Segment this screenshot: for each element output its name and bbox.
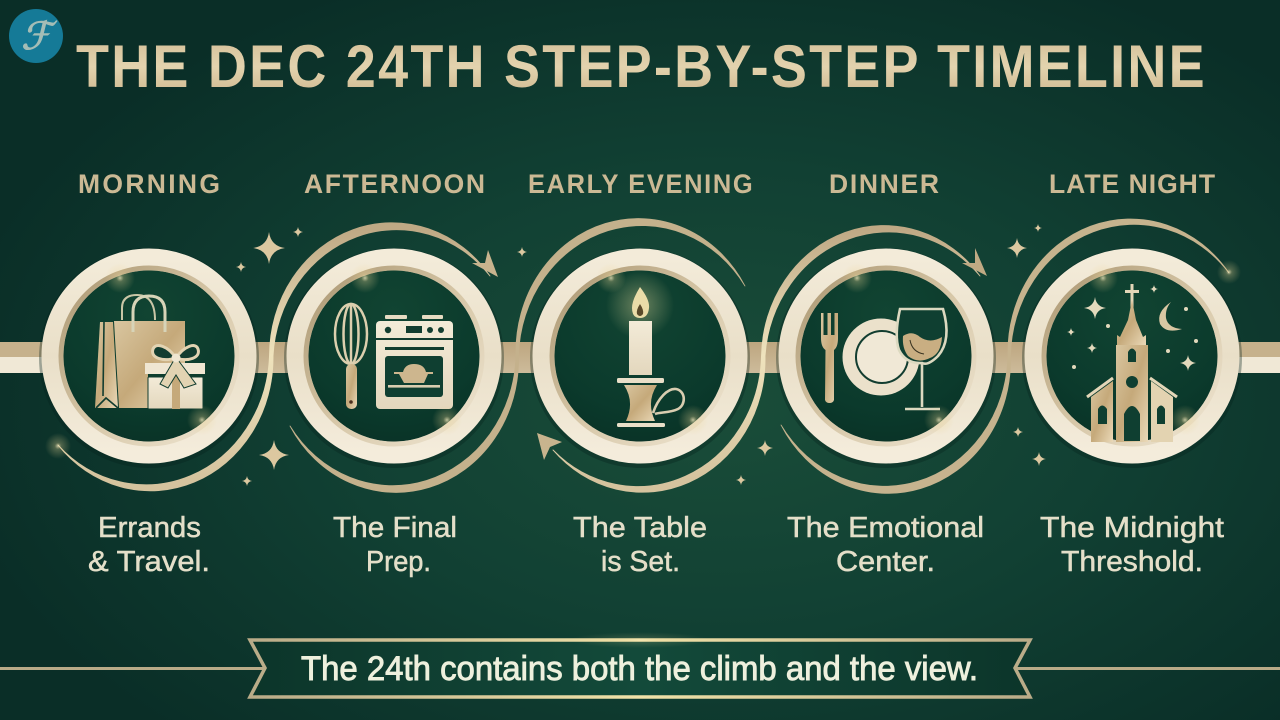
- logo badge: [9, 9, 63, 63]
- step descriptions: The Midnight: [1040, 512, 1224, 544]
- step descriptions: The Final: [333, 512, 457, 544]
- arc arrow: dinner to late night: [781, 219, 1241, 493]
- step 5 ring: late night: [1022, 248, 1242, 468]
- banner: closing statement: The 24th contains both the climb and the view.: [301, 650, 978, 688]
- timeline band: [0, 342, 1280, 373]
- step descriptions: Prep.: [366, 546, 431, 578]
- step descriptions: [88, 512, 1224, 578]
- step headings: MORNING: [78, 169, 220, 199]
- step headings: LATE NIGHT: [1049, 169, 1215, 199]
- step descriptions: & Travel.: [88, 546, 210, 578]
- arc arrow: early evening to dinner: [537, 226, 987, 492]
- step descriptions: Threshold.: [1061, 546, 1203, 578]
- step 2 ring: afternoon: [284, 248, 504, 468]
- step headings: EARLY EVENING: [528, 169, 753, 199]
- arc arrow: afternoon to early evening: [290, 219, 745, 492]
- icon: church with moon and stars: [1067, 284, 1198, 442]
- step headings: DINNER: [829, 169, 939, 199]
- icon: candle on holder: [606, 271, 684, 427]
- icon: whisk and oven: [335, 304, 453, 409]
- step descriptions: The Emotional: [787, 512, 984, 544]
- logo badge: ℱ: [21, 16, 57, 58]
- icon: shopping bag and gift: [95, 295, 205, 409]
- icon: fork, plate and wine glass: [821, 309, 947, 409]
- step descriptions: Errands: [98, 512, 201, 544]
- step descriptions: Center.: [836, 546, 935, 578]
- step 1 ring: morning: [39, 248, 259, 468]
- step descriptions: is Set.: [601, 546, 680, 578]
- title: THE DEC 24TH STEP-BY-STEP TIMELINE: [76, 33, 1205, 101]
- step 3 ring: early evening: [530, 248, 750, 468]
- step 4 ring: dinner: [776, 248, 996, 468]
- sparkle stars: [236, 224, 1046, 486]
- step descriptions: The Table: [573, 512, 707, 544]
- banner: closing statement: [0, 632, 1280, 697]
- step headings: [78, 169, 1215, 199]
- arc arrow: morning to afternoon: [45, 223, 498, 491]
- step headings: AFTERNOON: [304, 169, 485, 199]
